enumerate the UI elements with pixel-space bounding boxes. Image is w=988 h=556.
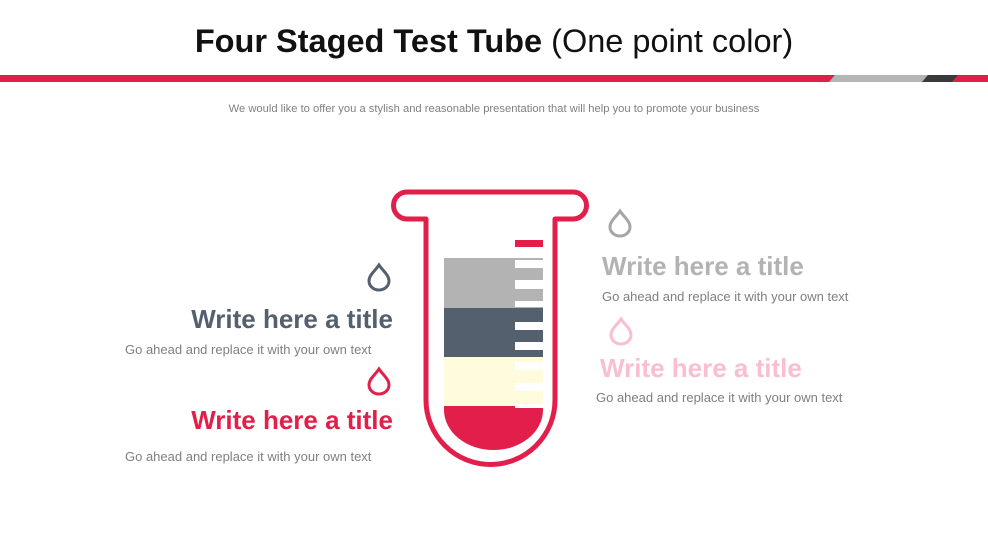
header bar [0,75,988,82]
icon: drop pink [610,316,632,346]
icon: drop dark [368,262,390,292]
title: Four Staged Test Tube (One point color) [195,23,793,59]
block: pink title [596,353,842,405]
block: dark title: Write here a title [191,304,393,334]
icon: drop grey [608,208,632,238]
block: red title: Go ahead and replace it with your own text [125,449,371,464]
block: grey title: Write here a title [602,251,804,281]
block: red title: Write here a title [191,405,393,435]
block: grey title: Go ahead and replace it with your own text [602,289,848,304]
block: red title [125,405,393,464]
block: pink title: Write here a title [600,353,802,383]
block: dark title [125,304,393,357]
block: pink title: Go ahead and replace it with your own text [596,390,842,405]
icon: drop red [368,366,390,396]
block: dark title: Go ahead and replace it with your own text [125,342,371,357]
subtitle: We would like to offer you a stylish and reasonable presentation that will help you to promote your business [229,103,759,115]
block: grey title [602,251,848,304]
